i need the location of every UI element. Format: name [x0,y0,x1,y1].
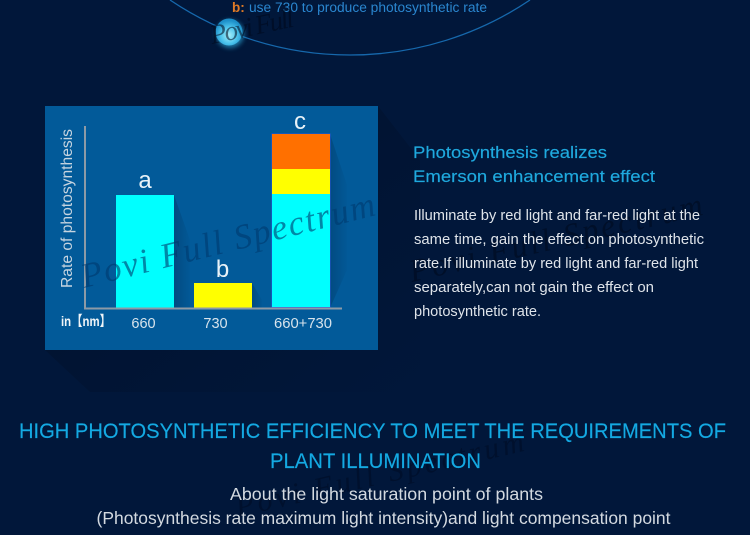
bar c: 660+730 [272,108,330,308]
bar b: 730 [194,256,252,308]
x axis labels: 660 [131,316,156,332]
orbit arc [170,0,530,55]
main heading [19,419,726,473]
watermark: bottom: Povi Full Spectrum [231,425,527,524]
text block: explanation [414,207,704,320]
subheading text: About the light saturation point of plants [230,484,543,504]
bar c: 660+730: c [294,108,306,135]
icon: glowing orbit ball [216,18,244,48]
bar a: 660: a [138,167,152,194]
caption: b use 730: b: [232,0,245,15]
bar a: 660 [116,167,174,308]
chart axes [85,126,342,308]
watermark: paragraph: Povi Full Spectrum [405,186,706,289]
bar shadows [174,134,347,308]
x axis labels [61,313,332,332]
panel: photosynthesis chart [45,106,378,350]
caption: b use 730: use 730 to produce photosynthetic rate [249,0,487,15]
y axis label: Rate of photosynthesis [59,129,76,288]
heading: Emerson enhancement effect: Photosynthesis realizes [413,143,607,162]
text block: explanation: separately,can not gain the effect on [414,279,654,296]
heading: Emerson enhancement effect [413,143,655,186]
text block: explanation: Illuminate by red light and far-red light at the [414,207,700,224]
text block: explanation: photosynthetic rate. [414,303,541,320]
bar b: 730: b [216,256,229,283]
x axis labels: 660+730 [274,316,332,332]
heading: Emerson enhancement effect: Emerson enhancement effect [413,167,655,186]
x axis labels: in【nm】 [61,313,111,329]
text block: explanation: same time, gain the effect on photosynthetic [414,231,704,248]
subheading text: (Photosynthesis rate maximum light intensity)and light compensation point [96,508,671,528]
watermark: chart: Povi Full Spectrum [76,185,379,296]
text block: explanation: rate.If illuminate by red light and far-red light [414,255,699,272]
panel shadow [45,106,420,392]
x axis labels: 730 [203,316,228,332]
main heading: PLANT ILLUMINATION [270,449,481,473]
subheading text [96,484,671,528]
watermark: top: Povi Full [206,3,296,50]
